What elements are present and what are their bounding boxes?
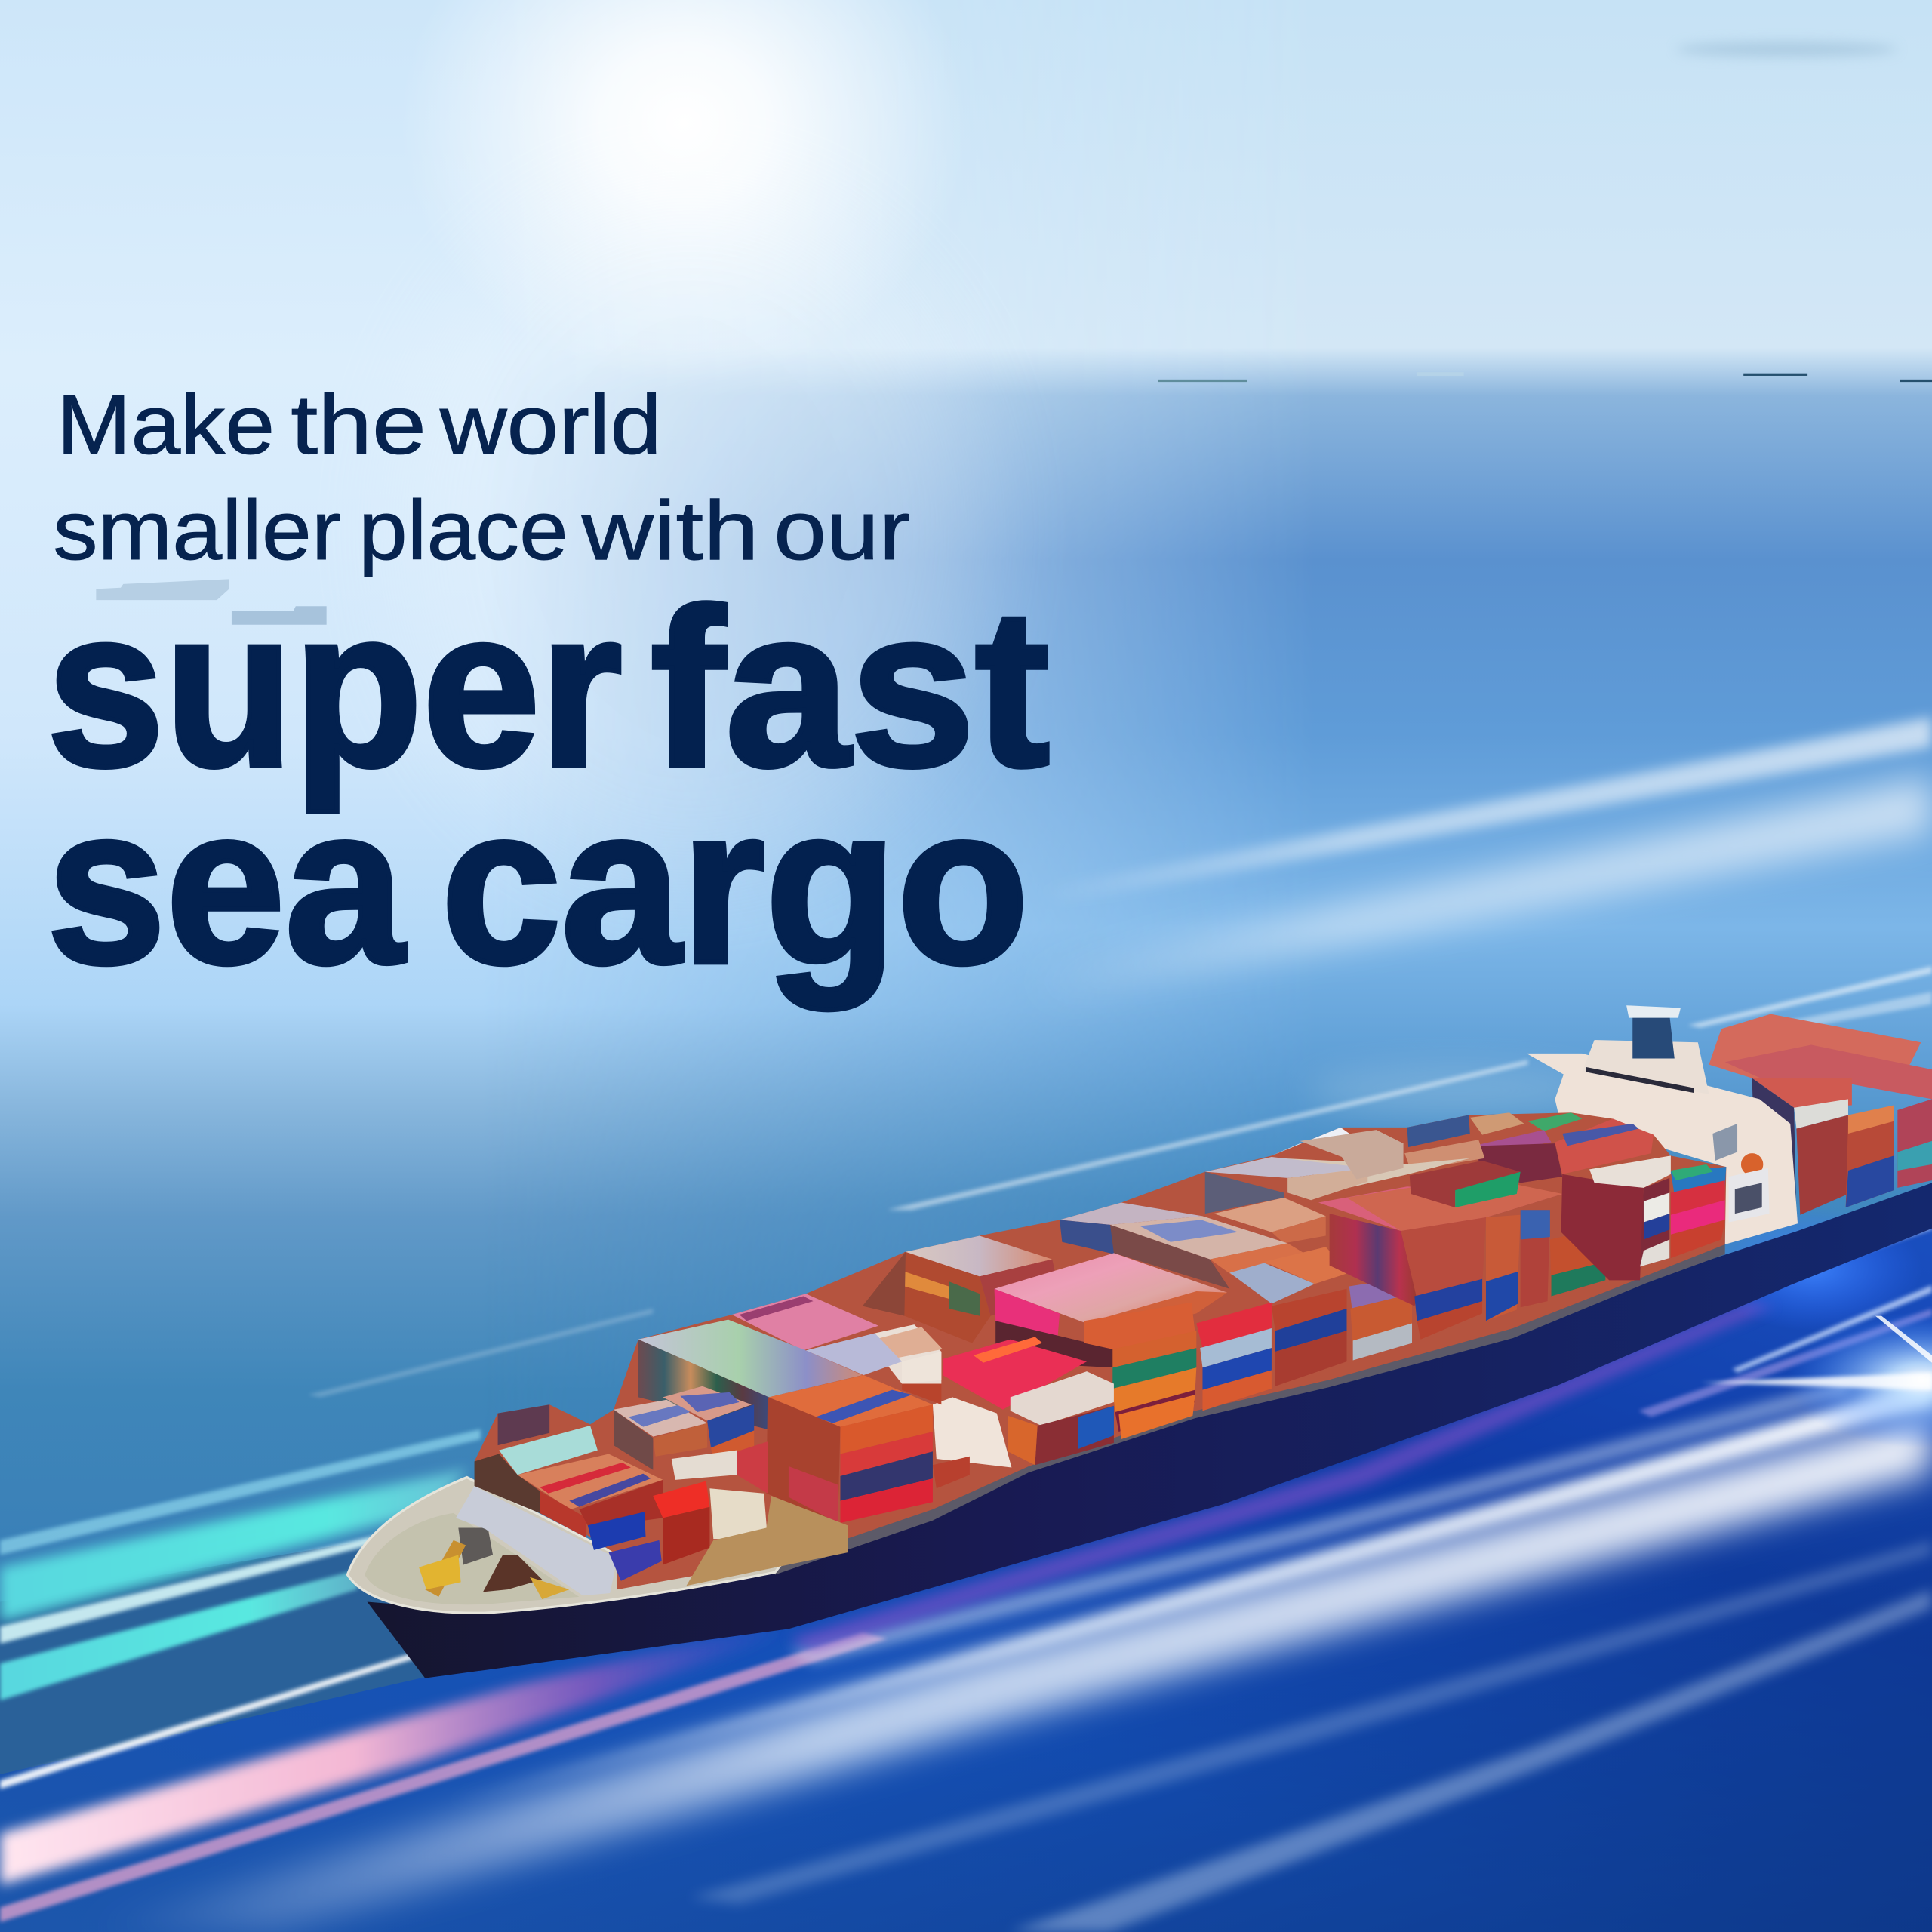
midship tier: striped front stacks (1112, 1281, 1412, 1439)
deep blue sea below the hull (0, 1220, 1932, 1932)
container mass silhouette (475, 1112, 1726, 1589)
headline: super fast sea cargo: sea (47, 759, 405, 1010)
headline: super fast sea cargo (47, 562, 1050, 1011)
grey container block (1205, 1172, 1284, 1214)
lens flare (1700, 1312, 1932, 1447)
headline: super fast sea cargo: super (47, 562, 622, 814)
deck equipment rail (775, 1244, 1725, 1575)
small pale ships behind the text (96, 579, 327, 625)
forward tier: small front stacks (614, 1386, 848, 1586)
headline: intro lines (53, 377, 911, 577)
container ship (347, 1005, 1932, 1678)
superstructure (1527, 1005, 1798, 1244)
headline: intro lines: with (580, 483, 759, 577)
bow deck (347, 1478, 789, 1613)
midship tier: tall stacks (1318, 1155, 1726, 1340)
headline: intro lines: Make (57, 377, 275, 472)
bow bulwark (456, 1486, 617, 1595)
stern container stacks (1709, 1014, 1932, 1223)
green topped container (1410, 1161, 1521, 1208)
cyan light trails at the bow (0, 1429, 481, 1700)
forward tier: red and white stacks (875, 1324, 1114, 1488)
distant ships on the horizon (1158, 372, 1932, 382)
midship tier: pink topped block (904, 1236, 1227, 1367)
headline: intro lines: place (358, 483, 568, 577)
bow equipment (365, 1513, 579, 1604)
headline: intro lines: the (291, 377, 426, 472)
forward tier: large stacks (638, 1252, 943, 1523)
headline: intro lines: smaller (53, 483, 341, 577)
dark water left of the bow (0, 1540, 468, 1823)
midship tier: mid row (1060, 1202, 1349, 1303)
hull (368, 1183, 1932, 1678)
midship tier: upper back stacks (1205, 1112, 1654, 1243)
lower speed streaks and light trails (0, 1208, 1932, 1932)
headline: intro lines: our (774, 483, 911, 577)
headline: super fast sea cargo: fast (651, 562, 1050, 813)
upper speed streaks (308, 717, 1932, 1397)
headline: intro lines: world (439, 377, 662, 472)
bow container stacks (475, 1404, 709, 1581)
headline: super fast sea cargo: cargo (441, 759, 1029, 1011)
